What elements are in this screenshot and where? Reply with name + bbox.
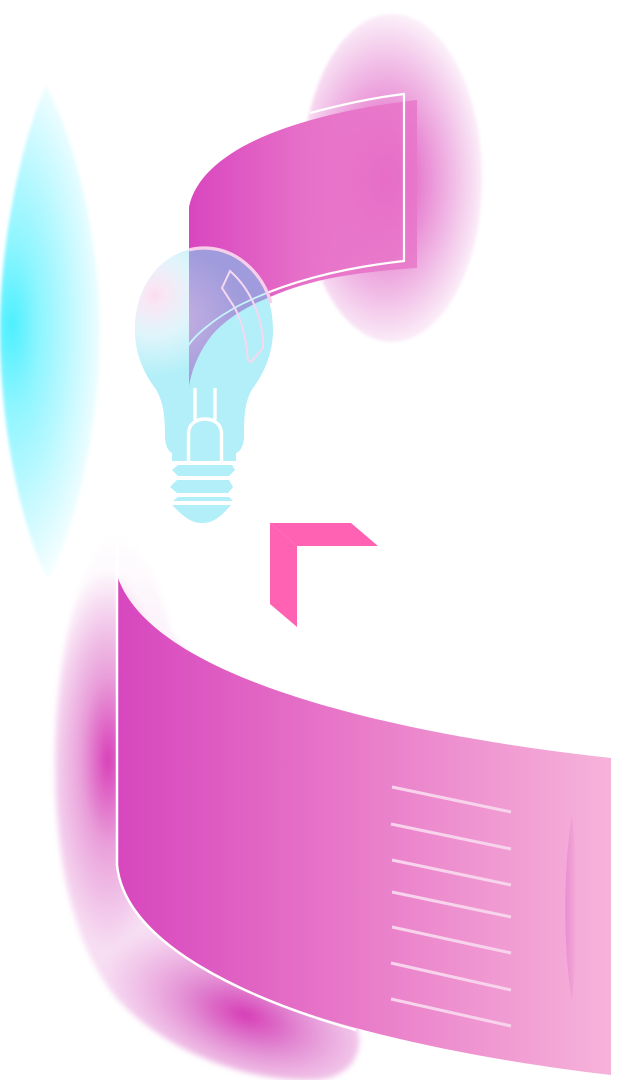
screw base xyxy=(172,465,235,476)
icon: light bulb xyxy=(134,246,273,523)
panel: large curved band xyxy=(117,538,611,1075)
band crease xyxy=(565,815,576,1000)
text lines xyxy=(391,787,511,1026)
glow: cyan lens xyxy=(0,85,100,580)
icon: pink corner box xyxy=(270,523,378,627)
bulb highlight xyxy=(135,250,189,385)
bulb overlap with band xyxy=(189,250,268,386)
band outline xyxy=(117,538,356,1030)
filament xyxy=(188,388,222,461)
glow: top pink xyxy=(302,14,482,342)
reflection xyxy=(222,271,263,362)
panel: upper curved band xyxy=(188,94,417,386)
glow: lower pink xyxy=(52,574,362,1080)
bulb rim xyxy=(189,248,271,303)
band outline xyxy=(188,94,404,346)
